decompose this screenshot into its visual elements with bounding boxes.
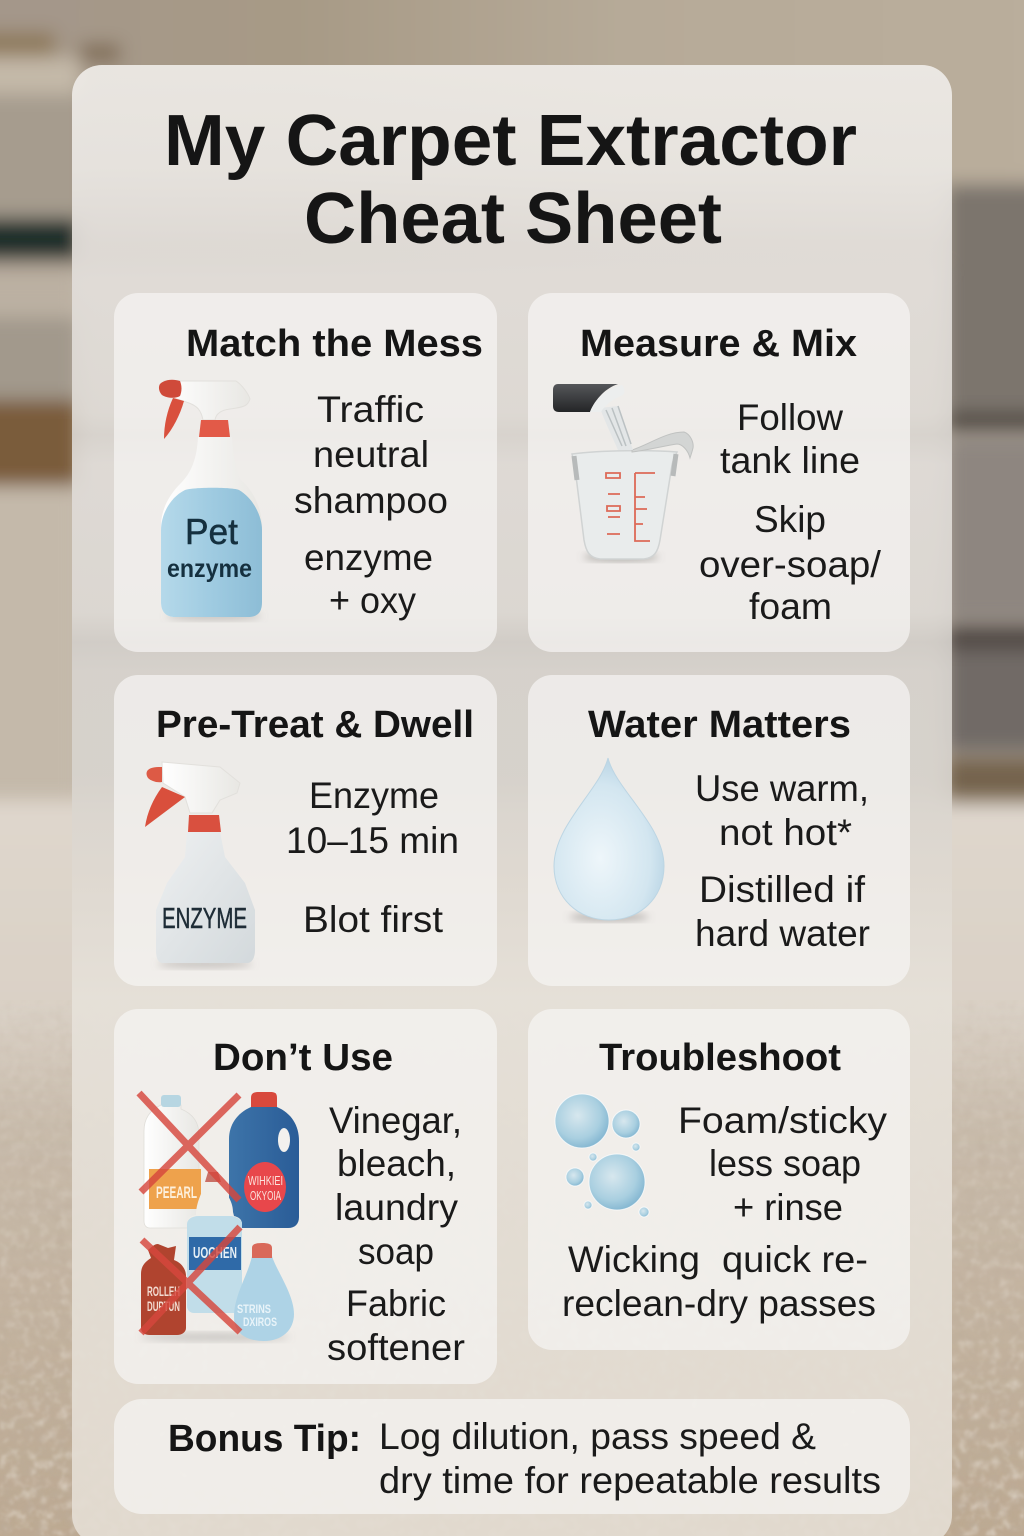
icon: red-brown bottle: DUPTUN (147, 1298, 180, 1314)
panel: bonus tip (114, 1399, 910, 1514)
text: pre-treat and dwell tips (286, 775, 459, 940)
text: match the mess tips: + oxy (329, 580, 416, 621)
text: troubleshoot tips: less soap (709, 1143, 861, 1184)
icon: measuring cup with pouring liquid (553, 384, 693, 561)
text: troubleshoot tips: Foam/sticky (678, 1100, 888, 1141)
heading: don't use: Don’t Use (213, 1037, 393, 1079)
icon: pet enzyme spray bottle: enzyme (167, 555, 252, 583)
text: measure and mix tips: over-soap/ (699, 544, 882, 585)
icon: enzyme spray bottle: ENZYME (162, 903, 247, 935)
text: match the mess tips: enzyme (304, 537, 433, 578)
icon: white bottle with orange label: PEEARL (156, 1183, 197, 1202)
text: troubleshoot tips: reclean-dry passes (562, 1283, 876, 1324)
text: measure and mix tips: foam (749, 586, 832, 627)
icon: clear blue softener bottle: STRINS (237, 1302, 271, 1316)
text: don't use list: laundry (335, 1187, 458, 1228)
text: measure and mix tips: Skip (754, 499, 826, 540)
panel: match the mess (114, 293, 497, 652)
heading: match the mess: Match the Mess (186, 323, 483, 365)
title (164, 101, 857, 259)
text: water matters tips (695, 768, 870, 954)
heading: water matters: Water Matters (588, 704, 851, 746)
icon: blue detergent jug (229, 1092, 299, 1228)
icon: pet enzyme spray bottle (159, 380, 262, 620)
panel: pre-treat and dwell (114, 675, 497, 986)
text: measure and mix tips: Follow (737, 397, 843, 438)
text: match the mess tips: Traffic (317, 389, 424, 430)
panel: water matters (528, 675, 910, 986)
text: water matters tips: not hot* (719, 812, 852, 853)
text: troubleshoot tips: quick re- (722, 1239, 868, 1280)
heading: troubleshoot: Troubleshoot (599, 1037, 841, 1079)
panel: troubleshoot (528, 1009, 910, 1350)
text: water matters tips: hard water (695, 913, 870, 954)
text: measure and mix tips: tank line (720, 440, 860, 481)
heading: bonus tip: Bonus Tip: (168, 1418, 361, 1460)
text: pre-treat and dwell tips: Enzyme (309, 775, 439, 816)
text: troubleshoot tips: + rinse (733, 1187, 843, 1228)
text: bonus tip body: dry time for repeatable results (379, 1460, 881, 1501)
title: Cheat Sheet (304, 179, 722, 259)
text: don't use list: bleach, (337, 1143, 456, 1184)
text: pre-treat and dwell tips: Blot first (303, 899, 444, 940)
text: water matters tips: Use warm, (695, 768, 869, 809)
text: match the mess tips (294, 389, 448, 621)
text: measure and mix tips (699, 397, 882, 627)
text: troubleshoot tips: Wicking (568, 1239, 700, 1280)
icon: crossed-out cleaning products (139, 1092, 299, 1341)
text: troubleshoot tips (562, 1100, 888, 1324)
icon: blue detergent jug: WIHKIEI (248, 1173, 283, 1188)
text: don't use list: softener (327, 1327, 465, 1368)
text: don't use list: Vinegar, (329, 1100, 462, 1141)
icon: foam bubbles (555, 1094, 649, 1217)
heading: pre-treat and dwell: Pre-Treat & Dwell (156, 704, 474, 746)
icon: red-brown bottle (141, 1244, 186, 1335)
icon: pale blue bottle: UOCHEN (193, 1245, 237, 1262)
icon: white bottle with orange label (144, 1095, 201, 1228)
panel: measure and mix (528, 293, 910, 652)
icon: red-brown bottle: ROLLEH (147, 1283, 180, 1299)
text: pre-treat and dwell tips: 10–15 min (286, 820, 459, 861)
icon: red cross marks (139, 1093, 240, 1333)
icon: clear blue softener bottle: DXIROS (243, 1315, 277, 1329)
icon: pale blue bottle (187, 1172, 242, 1313)
text: bonus tip body: Log dilution, pass speed & (379, 1416, 816, 1457)
text: match the mess tips: shampoo (294, 480, 448, 521)
panel: don't use (114, 1009, 497, 1384)
icon: water drop (554, 758, 664, 921)
title: My Carpet Extractor (164, 101, 857, 181)
text: bonus tip body (379, 1416, 881, 1501)
icon: enzyme spray bottle (145, 762, 255, 968)
text: don't use list (327, 1100, 465, 1368)
text: don't use list: Fabric (346, 1283, 446, 1324)
icon: pet enzyme spray bottle: Pet (185, 511, 238, 552)
icon: clear blue softener bottle (234, 1243, 294, 1341)
heading: measure and mix: Measure & Mix (580, 323, 857, 365)
text: match the mess tips: neutral (313, 434, 429, 475)
text: water matters tips: Distilled if (699, 869, 866, 910)
text: don't use list: soap (358, 1231, 434, 1272)
icon: blue detergent jug: OKYOIA (250, 1188, 281, 1203)
